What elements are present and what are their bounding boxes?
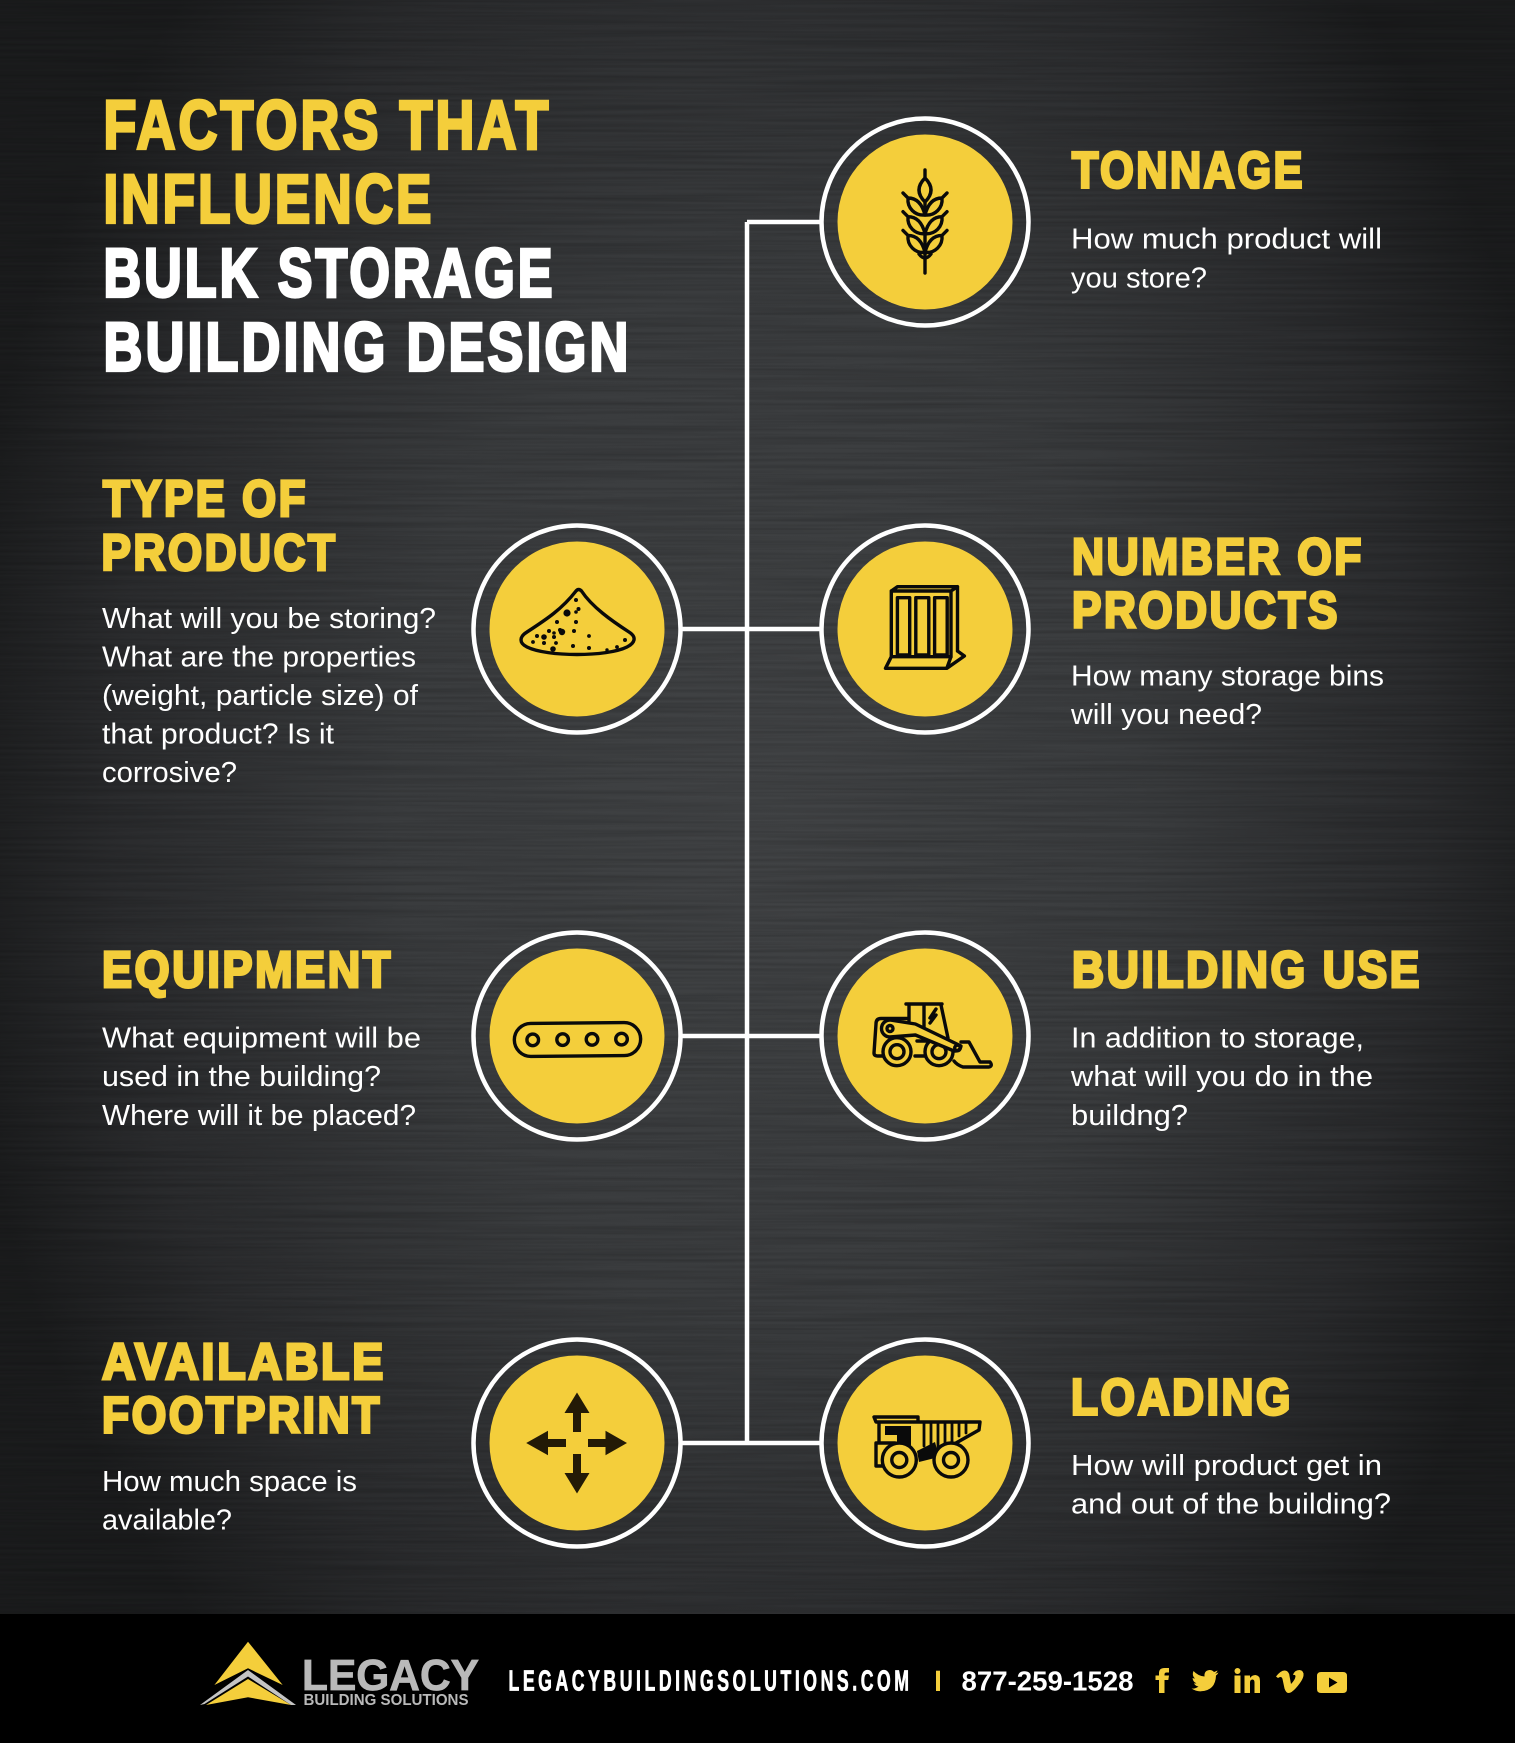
text: equipment description: used in the building? (102, 1061, 381, 1093)
phone: 877-259-1528 (962, 1666, 1134, 1697)
logo: Legacy Building Solutions: LEGACY (302, 1651, 479, 1700)
text: loading description: and out of the building? (1071, 1488, 1391, 1520)
text: building use description: In addition to storage, (1071, 1022, 1364, 1054)
heading: available footprint: FOOTPRINT (102, 1386, 382, 1444)
text: tonnage description (1071, 224, 1382, 294)
panel: building use (822, 932, 1422, 1140)
icon: four directional arrows (474, 1340, 680, 1546)
footer (0, 1614, 1515, 1743)
heading: available footprint (102, 1333, 386, 1444)
title: FACTORS THAT (104, 86, 552, 164)
icon: twitter (1192, 1670, 1218, 1691)
icon: material pile (474, 526, 680, 732)
heading: number of products: PRODUCTS (1072, 582, 1340, 638)
heading: type of product (102, 470, 338, 581)
text: number of products description: will you need? (1070, 699, 1262, 731)
text: type of product description: (weight, particle size) of (102, 680, 419, 712)
text: available footprint description (102, 1466, 357, 1536)
icon: conveyor belt (474, 932, 680, 1140)
heading: type of product: TYPE OF (103, 470, 308, 527)
heading: equipment: EQUIPMENT (102, 941, 393, 998)
text: available footprint description: How much space is (102, 1466, 357, 1498)
connector lines (682, 222, 820, 1443)
heading: type of product: PRODUCT (102, 524, 338, 581)
heading: available footprint: AVAILABLE (102, 1333, 386, 1390)
icon: vimeo (1276, 1670, 1304, 1693)
divider (936, 1671, 940, 1691)
text: tonnage description: you store? (1071, 262, 1207, 294)
logo: Legacy Building Solutions: BUILDING SOLUTIONS (304, 1692, 469, 1709)
website: LEGACYBUILDINGSOLUTIONS.COM (508, 1667, 909, 1698)
icon: facebook (1156, 1668, 1169, 1693)
heading: loading: LOADING (1071, 1368, 1293, 1426)
text: type of product description (102, 603, 436, 789)
text: type of product description: What are the properties (102, 642, 416, 674)
heading: building use: BUILDING USE (1072, 941, 1422, 998)
text: type of product description: corrosive? (102, 757, 237, 789)
text: available footprint description: available? (102, 1504, 232, 1536)
icon: youtube (1317, 1672, 1347, 1693)
title (104, 86, 632, 386)
text: loading description: How will product get in (1071, 1450, 1382, 1482)
panel: number of products (822, 526, 1384, 732)
text: type of product description: What will you be storing? (102, 603, 436, 635)
heading: tonnage: TONNAGE (1072, 142, 1305, 198)
text: building use description (1070, 1022, 1373, 1132)
title: INFLUENCE (104, 160, 434, 238)
title: BUILDING DESIGN (104, 308, 632, 386)
heading: number of products: NUMBER OF (1072, 528, 1364, 585)
icon: dump truck (822, 1340, 1028, 1546)
logo: Legacy Building Solutions (200, 1642, 479, 1709)
text: equipment description (102, 1022, 421, 1132)
panel: tonnage (822, 118, 1382, 326)
text: equipment description: Where will it be placed? (102, 1100, 416, 1132)
title: BULK STORAGE (104, 234, 556, 312)
panel: equipment (102, 932, 680, 1140)
icon: skid steer loader (822, 932, 1028, 1140)
text: number of products description: How many storage bins (1071, 661, 1384, 693)
icon: wheat (822, 118, 1028, 326)
text: loading description (1071, 1450, 1391, 1520)
text: type of product description: that product? Is it (102, 718, 334, 750)
text: building use description: buildng? (1071, 1100, 1188, 1132)
panel: loading (822, 1340, 1391, 1546)
text: building use description: what will you do in the (1070, 1061, 1373, 1093)
text: equipment description: What equipment will be (102, 1022, 421, 1054)
text: tonnage description: How much product will (1071, 224, 1382, 256)
text: number of products description (1070, 661, 1384, 731)
icon: storage bins (822, 526, 1028, 732)
heading: number of products (1072, 528, 1364, 638)
icon: linkedin (1234, 1668, 1260, 1693)
panel: available footprint (102, 1333, 680, 1546)
panel: type of product (102, 470, 680, 789)
